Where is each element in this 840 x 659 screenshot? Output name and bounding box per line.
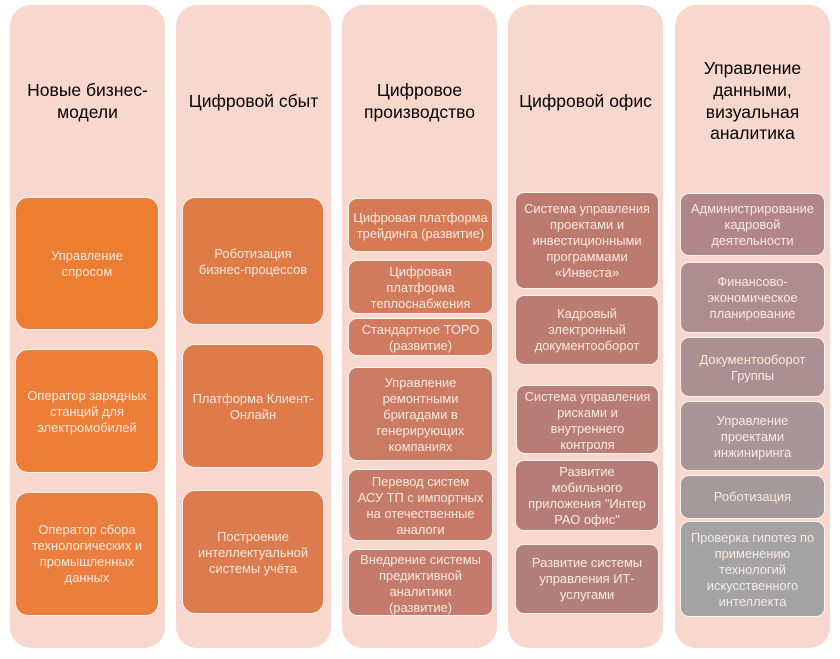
box: Управление проектами инжиниринга: Управление — [717, 413, 788, 428]
box: Управление спросом: спросом — [62, 264, 112, 278]
box: Развитие системы управления ИТ-услугами: услугами — [560, 587, 614, 602]
box: Система управления проектами: «Инвеста» — [555, 264, 619, 280]
box: Администрирование кадровой деятельности: деятельности — [711, 232, 794, 248]
box: Кадровый электронный документооборот: документооборот — [535, 338, 639, 353]
box: Перевод систем АСУ ТП — [348, 469, 493, 541]
box: Управление проектами инжиниринга — [680, 401, 825, 471]
box: Оператор сбора данных — [15, 492, 159, 616]
box: Управление спросом — [15, 197, 159, 330]
box: Построение интеллектуальной системы учёта — [182, 490, 324, 614]
box: Внедрение системы предиктивной аналитики: Внедрение системы — [360, 552, 481, 566]
box: Роботизация бизнес-процессов: Роботизация — [214, 246, 292, 261]
box: Оператор зарядных станций — [15, 349, 159, 473]
box: Управление ремонтными бригадами: Управление — [385, 375, 456, 390]
box: Развитие системы управления ИТ-услугами: управления ИТ- — [539, 571, 635, 586]
heading: Цифровой офис — [519, 91, 652, 111]
box: Оператор сбора данных: Оператор сбора — [38, 522, 136, 537]
box: Цифровая платформа теплоснабжения — [348, 260, 493, 314]
box: Развитие мобильного приложения: РАО офис" — [554, 512, 620, 526]
box: Построение интеллектуальной системы учёта: интеллектуальной — [198, 545, 308, 560]
panel: Управление данными — [675, 5, 830, 648]
box: Оператор зарядных станций: электромобилей — [37, 420, 137, 435]
box: Внедрение системы предиктивной аналитики — [348, 549, 493, 616]
box: Внедрение системы предиктивной аналитики: предиктивной — [379, 568, 462, 582]
heading: аналитика — [710, 123, 795, 143]
box: Система управления проектами: программами — [546, 248, 628, 264]
heading: Цифровой сбыт — [189, 91, 318, 111]
box: Управление проектами инжиниринга: инжиниринга — [714, 445, 791, 460]
box: Документооборот Группы: Группы — [731, 368, 774, 383]
box: Цифровая платформа трейдинга — [348, 198, 493, 252]
box: Оператор зарядных станций: станций для — [50, 404, 124, 419]
heading: Цифровое — [377, 80, 462, 100]
box: Цифровая платформа трейдинга: трейдинга (развитие) — [357, 226, 484, 241]
box: Управление ремонтными бригадами — [348, 367, 493, 461]
box: Управление ремонтными бригадами: ремонтными — [383, 391, 458, 406]
box: Финансово-экономическое планирование: Финансово- — [717, 274, 788, 288]
box: Развитие мобильного приложения: Развитие — [559, 464, 615, 478]
box: Цифровая платформа трейдинга: Цифровая платформа — [353, 210, 488, 225]
box: Кадровый электронный документооборот: электронный — [548, 322, 626, 337]
box: Финансово-экономическое планирование — [680, 262, 825, 333]
box: Роботизация: Роботизация — [714, 489, 791, 504]
box: Система управления рисками — [516, 385, 659, 454]
box: Платформа Клиент-Онлайн — [182, 344, 324, 468]
box: Построение интеллектуальной системы учёта: системы учёта — [209, 561, 297, 576]
heading — [27, 80, 148, 122]
box: Система управления проектами — [515, 192, 659, 289]
heading: визуальная — [706, 102, 799, 122]
box: Проверка гипотез: искусственного — [707, 578, 798, 593]
box: Управление ремонтными бригадами: бригадами в — [383, 407, 458, 422]
box: Финансово-экономическое планирование: экономическое — [707, 290, 798, 304]
box: Проверка гипотез — [680, 521, 825, 617]
box: Администрирование кадровой деятельности — [680, 193, 825, 256]
box: Развитие мобильного приложения — [515, 460, 659, 531]
panel: Новые бизнес-модели — [10, 5, 165, 648]
box: Роботизация — [680, 475, 825, 519]
box: Проверка гипотез: Проверка гипотез по — [691, 530, 814, 545]
heading: модели — [57, 102, 118, 122]
box: Платформа Клиент-Онлайн: Онлайн — [230, 407, 276, 422]
box: Перевод систем АСУ ТП: на отечественные — [366, 506, 475, 521]
panel: Цифровое производство — [342, 5, 497, 648]
box: Оператор сбора данных: технологических и — [32, 538, 142, 553]
box: Перевод систем АСУ ТП: аналоги — [396, 522, 445, 537]
box: Система управления рисками: рисками и — [557, 404, 618, 420]
panel: Цифровой офис — [508, 5, 663, 648]
heading — [704, 58, 801, 143]
heading: данными, — [713, 80, 792, 100]
heading: производство — [364, 102, 475, 122]
box: Оператор зарядных станций: Оператор зарядных — [27, 388, 147, 403]
box: Развитие мобильного приложения: приложения "Интер — [528, 496, 646, 510]
box: Оператор сбора данных: данных — [65, 570, 109, 585]
box: Администрирование кадровой деятельности: кадровой — [724, 216, 780, 232]
box: Платформа Клиент-Онлайн: Платформа Клиент- — [193, 391, 313, 406]
box: Управление проектами инжиниринга: проектами — [721, 429, 784, 444]
box: Построение интеллектуальной системы учёта: Построение — [217, 529, 289, 544]
box: Развитие системы управления ИТ-услугами — [515, 544, 659, 614]
box: Финансово-экономическое планирование: планирование — [710, 306, 795, 320]
box: Перевод систем АСУ ТП: АСУ ТП с импортных — [358, 490, 483, 505]
box: Внедрение системы предиктивной аналитики: аналитики — [389, 584, 452, 598]
box: Развитие системы управления ИТ-услугами: Развитие системы — [532, 555, 642, 570]
box: Система управления рисками: Система управления — [525, 388, 650, 404]
heading: Управление — [704, 58, 801, 78]
box: Цифровая платформа теплоснабжения: Цифровая — [389, 264, 452, 279]
panel: Цифровой сбыт — [176, 5, 331, 648]
box: Проверка гипотез: технологий — [719, 562, 786, 577]
box: Внедрение системы предиктивной аналитики: (развитие) — [389, 600, 452, 614]
box: Документооборот Группы — [680, 337, 825, 397]
box: Роботизация бизнес-процессов — [182, 197, 324, 325]
box: Управление ремонтными бригадами: компаниях — [389, 439, 452, 454]
heading — [364, 80, 475, 122]
heading: Новые бизнес- — [27, 80, 148, 100]
box: Стандартное ТОРО — [348, 318, 493, 356]
box: Управление спросом: Управление — [51, 248, 123, 262]
box: Цифровая платформа теплоснабжения: платформа — [386, 280, 455, 295]
box: Оператор сбора данных: промышленных — [40, 554, 134, 569]
box: Система управления проектами: Система управления — [524, 200, 650, 216]
box: Система управления проектами: проектами и — [550, 216, 624, 232]
box: Система управления рисками: контроля — [560, 436, 615, 452]
box: Роботизация бизнес-процессов: бизнес-процессов — [199, 262, 307, 277]
box: Документооборот Группы: Документооборот — [700, 352, 805, 367]
box: Администрирование кадровой деятельности: Администрирование — [691, 200, 814, 216]
box: Кадровый электронный документооборот: Кадровый — [557, 306, 617, 321]
box: Стандартное ТОРО: (развитие) — [389, 338, 452, 353]
box: Проверка гипотез: интеллекта — [719, 594, 786, 609]
box: Стандартное ТОРО: Стандартное ТОРО — [362, 322, 479, 337]
box: Управление ремонтными бригадами: генерирующих — [377, 423, 464, 438]
box: Перевод систем АСУ ТП: Перевод систем — [372, 474, 469, 489]
box: Развитие мобильного приложения: мобильного — [552, 480, 622, 494]
box: Система управления проектами: инвестиционными — [532, 232, 642, 248]
box: Кадровый электронный документооборот — [515, 295, 659, 365]
box: Цифровая платформа теплоснабжения: теплоснабжения — [371, 296, 470, 311]
box: Система управления рисками: внутреннего — [551, 420, 624, 436]
box: Проверка гипотез: применению — [715, 546, 790, 561]
